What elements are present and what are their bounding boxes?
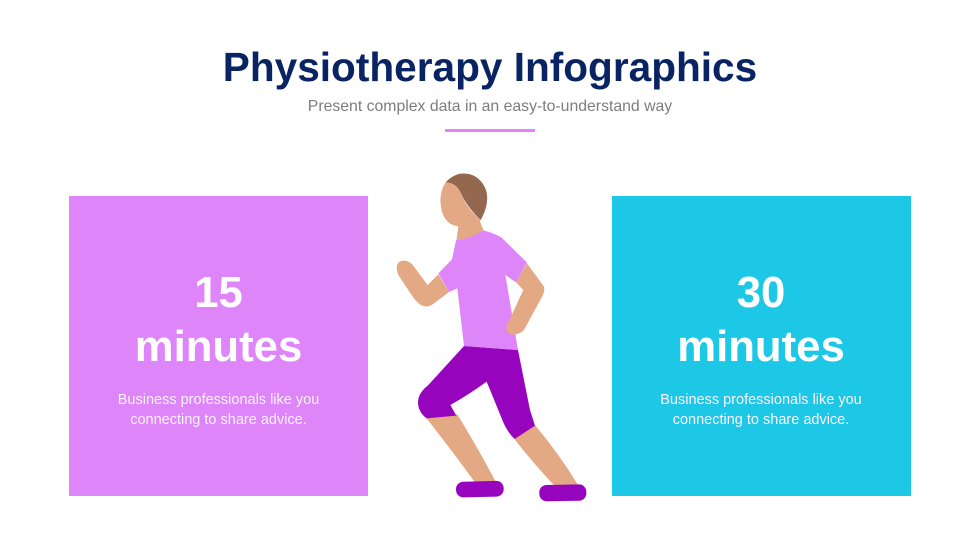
shoe right (539, 484, 586, 501)
unit: minutes: minutes (677, 322, 845, 371)
shorts (418, 346, 535, 439)
panel: 30 minutes (612, 196, 910, 496)
illustration: running person (396, 174, 586, 502)
back leg (514, 425, 578, 486)
panel: 15 minutes (69, 196, 368, 496)
unit: minutes: minutes (135, 322, 302, 371)
front leg (426, 414, 496, 482)
description: connecting to share advice. (130, 412, 307, 428)
description: connecting to share advice. (673, 412, 849, 428)
t-shirt (438, 230, 527, 350)
back arm (506, 263, 544, 335)
hair (446, 174, 487, 220)
subtitle: Present complex data in an easy-to-understand way (308, 98, 672, 115)
front arm (397, 261, 449, 307)
face (440, 182, 481, 226)
shoe left (456, 481, 504, 498)
description: Business professionals like you (118, 392, 319, 408)
number: 30: 30 (737, 268, 785, 317)
accent underline (445, 129, 535, 132)
number: 15: 15 (194, 268, 243, 317)
neck (456, 220, 484, 244)
description (660, 392, 862, 428)
description: Business professionals like you (660, 392, 862, 408)
title: Physiotherapy Infographics (223, 44, 757, 90)
description (118, 392, 319, 428)
